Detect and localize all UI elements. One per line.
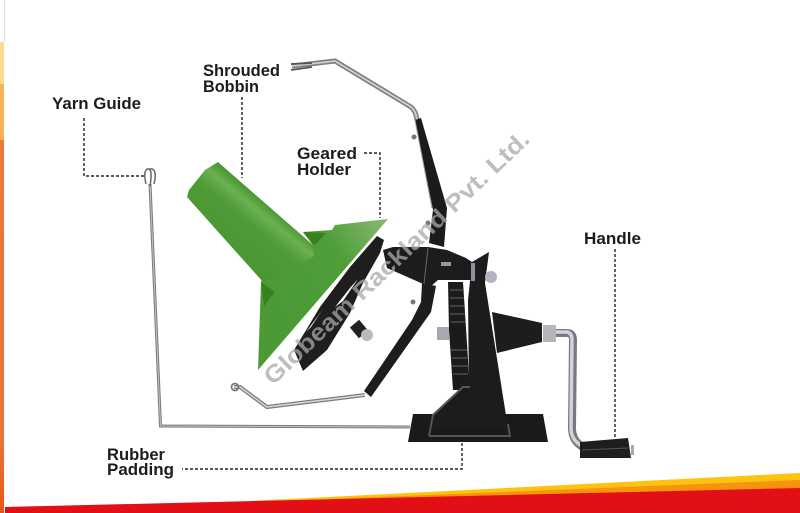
- label: Handle: Handle: [584, 229, 641, 248]
- label: Rubber Padding: [107, 443, 462, 479]
- yarn guide wire: [145, 169, 410, 427]
- watermark: Globeam Rackland Pvt. Ltd.: [259, 126, 535, 390]
- geared holder gear: [437, 282, 470, 390]
- label: Geared Holder: [297, 144, 380, 218]
- black mounting plate behind bobbin: [294, 236, 384, 371]
- label: Geared Holder: Geared: [297, 144, 357, 163]
- lower black arm: [364, 283, 436, 397]
- green shrouded bobbin: [187, 162, 388, 370]
- label: Geared Holder: Holder: [297, 160, 351, 179]
- label: Rubber Padding: Padding: [107, 460, 174, 479]
- bottom swoosh band: [5, 473, 800, 513]
- black hub: [383, 247, 472, 287]
- label: Shrouded Bobbin: [203, 61, 280, 178]
- label: Shrouded Bobbin: Shrouded: [203, 61, 280, 80]
- label: Yarn Guide: [52, 94, 145, 176]
- label: Shrouded Bobbin: Bobbin: [203, 77, 259, 96]
- upper black arm: [412, 118, 447, 247]
- left edge colour strip: [0, 0, 5, 513]
- lower wire arm: [232, 384, 365, 407]
- crank handle: [543, 325, 634, 458]
- label: Yarn Guide: Yarn Guide: [52, 94, 141, 113]
- label: Rubber Padding: Rubber: [107, 445, 165, 464]
- black stand with base: [408, 252, 548, 442]
- upper wire arm: [291, 61, 417, 120]
